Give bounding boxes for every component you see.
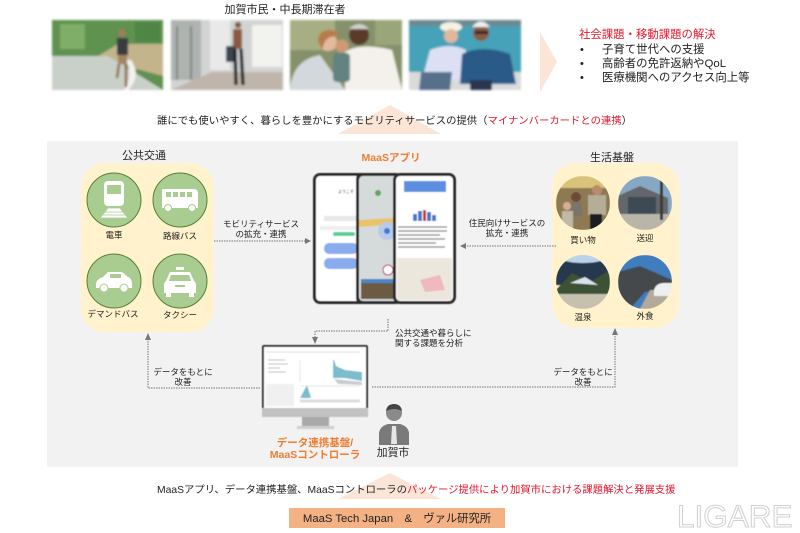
heading: MaaS app: MaaSアプリ [362, 152, 420, 164]
label: mobility expansion: の拡充・連携 [235, 229, 287, 239]
label: data platform [270, 436, 360, 461]
photo: woman in corridor [171, 20, 283, 90]
arrow: resident services to app [460, 243, 556, 249]
label: Kaga city: 加賀市 [377, 446, 409, 459]
icon: demand bus car [87, 254, 141, 308]
icon: bus [153, 173, 207, 227]
image: MaaS app phones: ようこそ [338, 188, 354, 194]
icon: train [87, 173, 141, 227]
photo: shopping [556, 176, 610, 230]
label: resident services: 拡充・連携 [486, 228, 529, 238]
label: demand bus: デマンドバス [87, 309, 139, 319]
text block: social issues: 高齢者の免許返納やQoL [602, 56, 726, 70]
text block: social issues: 医療機関へのアクセス向上等 [602, 70, 750, 84]
label: train: 電車 [105, 230, 123, 240]
photo: hot spring [556, 253, 610, 309]
arrow: app to data platform [312, 319, 388, 344]
label: data platform: MaaSコントローラ [270, 449, 360, 461]
photo: young family [290, 20, 402, 90]
panel: public transport [81, 149, 214, 332]
text block: social issues [579, 27, 750, 84]
image: MaaS app phones [313, 173, 456, 304]
label: route bus: 路線バス [163, 231, 197, 241]
label: taxi: タクシー [163, 310, 197, 320]
label: shopping: 買い物 [570, 235, 596, 245]
panel: platform background [47, 141, 738, 467]
label: improve right: 改善 [574, 377, 592, 387]
label: improve right: データをもとに [553, 367, 613, 377]
arrow: upward service [338, 105, 441, 134]
image: monitor dashboard [262, 345, 368, 429]
label: improve left: 改善 [174, 377, 192, 387]
box: providers: MaaS Tech Japan & ヴァル研究所 [303, 511, 491, 525]
label: analysis: 公共交通や暮らしに [395, 328, 472, 338]
text block: social issues: 社会課題・移動課題の解決 [579, 27, 716, 41]
label: improve left: データをもとに [153, 367, 213, 377]
label: resident services [469, 218, 545, 238]
arrow: package support upward [338, 473, 441, 499]
label: pick-up: 送迎 [636, 233, 654, 243]
photo: restaurant [618, 255, 672, 309]
arrow: data to daily life [372, 328, 618, 387]
arrow: to social issues [540, 32, 557, 92]
watermark: LIGARE: LIGARE [677, 498, 793, 533]
photo: boy running on road [52, 20, 163, 90]
icon: city official [379, 404, 409, 445]
text block: social issues: 子育て世代への支援 [602, 42, 705, 56]
heading: residents: 加賀市民・中長期滞在者 [224, 2, 346, 16]
label: mobility expansion [223, 219, 299, 239]
text: package statement: MaaSアプリ、データ連携基盤、MaaSコントローラのパッケージ提供により加賀市における課題解決と発展支援 [157, 483, 676, 496]
photo: elderly couple [409, 20, 521, 90]
arrow: mobility expansion to app [214, 238, 311, 244]
text block: social issues: • [580, 58, 584, 70]
label: analysis: 関する課題を分析 [395, 338, 464, 348]
text block: social issues: • [580, 72, 584, 84]
text block: social issues: • [580, 44, 584, 56]
label: improve right [553, 367, 613, 387]
box: providers [289, 508, 505, 528]
label: analysis [395, 328, 472, 348]
label: data platform: データ連携基盤/ [277, 436, 353, 449]
arrow: data to public transport [145, 333, 260, 388]
photo: pick-up building [618, 176, 672, 230]
label: resident services: 住民向けサービスの [469, 218, 545, 228]
icon: taxi [153, 254, 207, 308]
label: dining: 外食 [636, 311, 654, 321]
label: mobility expansion: モビリティサービス [223, 219, 299, 229]
panel: daily-life services [552, 150, 679, 328]
panel: daily-life services: 生活基盤 [590, 150, 634, 164]
panel: public transport: 公共交通 [122, 149, 166, 162]
text: mobility service statement: 誰にでも使いやすく、暮らしを豊かにするモビリティサービスの提供（マイナンバーカードとの連携） [157, 114, 632, 127]
label: improve left [153, 367, 213, 387]
label: hot spring: 温泉 [574, 312, 592, 322]
